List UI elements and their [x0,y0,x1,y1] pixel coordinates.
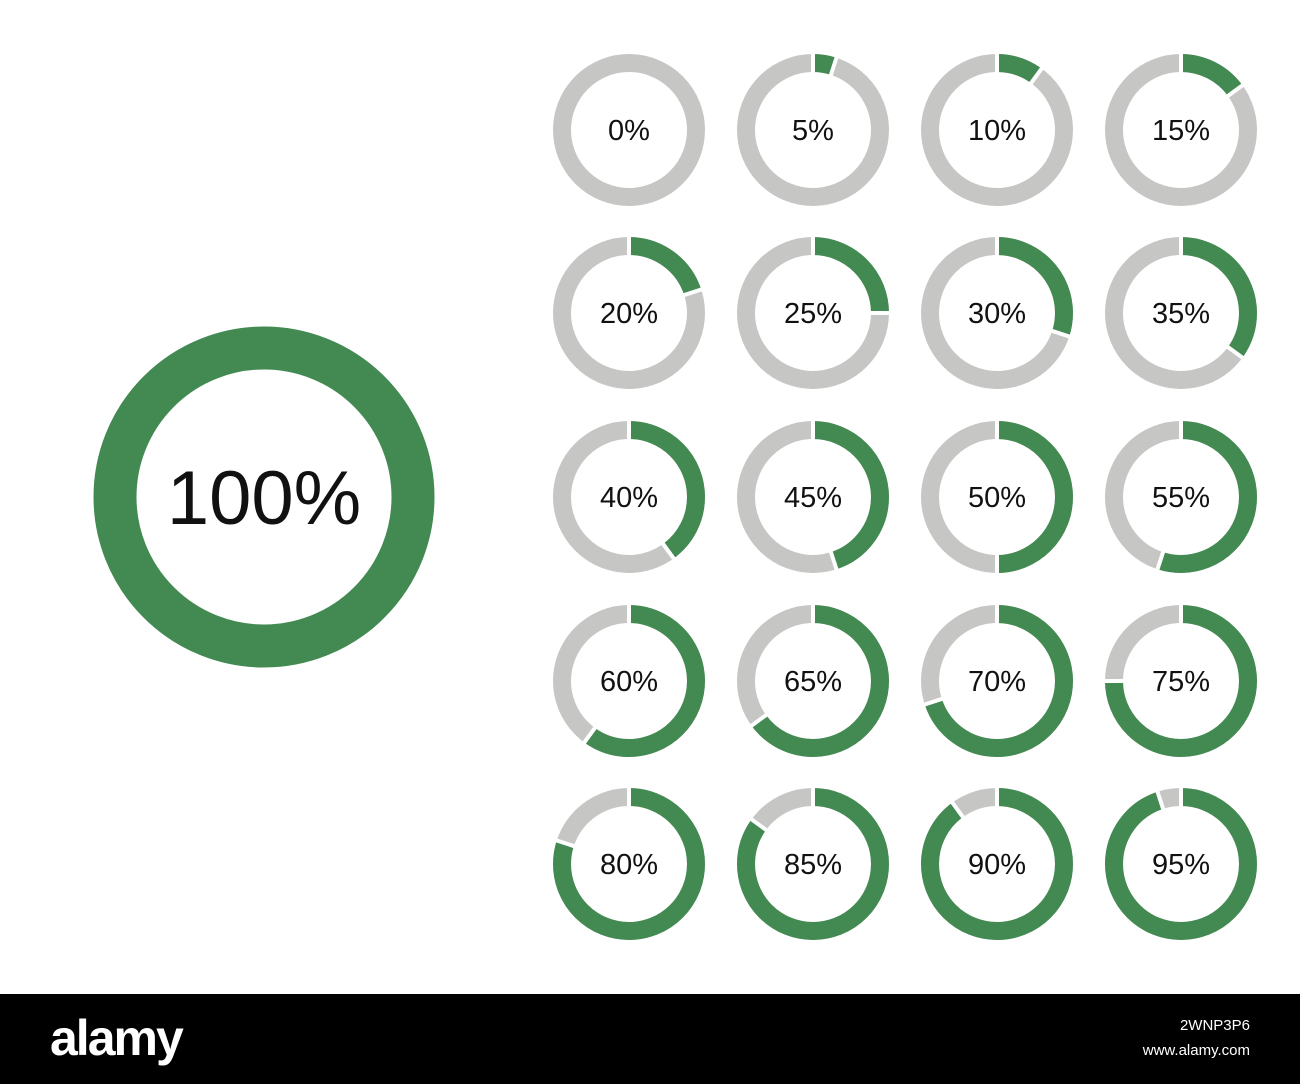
ring 5%: 5% [792,115,834,147]
ring 80%: 80% [600,849,658,881]
ring 40% [562,419,696,564]
footer bar [0,994,1300,1084]
ring 15% [1114,52,1248,197]
ring 35%: 35% [1152,298,1210,330]
ring 20% [562,235,703,380]
ring 35% [1114,235,1248,380]
ring 65% [746,603,880,748]
ring 30%: 30% [968,298,1026,330]
ring 80% [555,786,696,931]
ring 90%: 90% [968,849,1026,881]
ring 20%: 20% [600,298,658,330]
ring 0% [562,63,696,197]
ring 15%: 15% [1152,115,1210,147]
ring 40%: 40% [600,482,658,514]
ring 25%: 25% [784,298,842,330]
ring 90% [930,786,1064,931]
ring 5% [746,52,880,197]
ring 10%: 10% [968,115,1026,147]
ring 85% [746,786,880,931]
footer image id: 2WNP3P6 [1180,1017,1250,1034]
ring 45% [746,419,880,571]
ring 50%: 50% [968,482,1026,514]
footer url: www.alamy.com [1142,1042,1250,1059]
ring 0%: 0% [608,115,650,147]
ring 70%: 70% [968,666,1026,698]
ring 25% [746,235,891,380]
footer logo: alamy [50,1010,184,1066]
big ring 100%: 100% [167,456,361,541]
ring 60% [562,603,696,748]
ring 95% [1114,786,1248,931]
ring 65%: 65% [784,666,842,698]
ring 55% [1114,419,1248,571]
ring 95%: 95% [1152,849,1210,881]
big ring 100% [115,348,413,646]
ring 55%: 55% [1152,482,1210,514]
ring 45%: 45% [784,482,842,514]
ring 70% [923,603,1064,748]
ring 75%: 75% [1152,666,1210,698]
ring 50% [930,419,1064,575]
ring 75% [1103,603,1248,748]
ring 10% [930,52,1064,197]
ring 85%: 85% [784,849,842,881]
ring 60%: 60% [600,666,658,698]
ring 30% [930,235,1071,380]
